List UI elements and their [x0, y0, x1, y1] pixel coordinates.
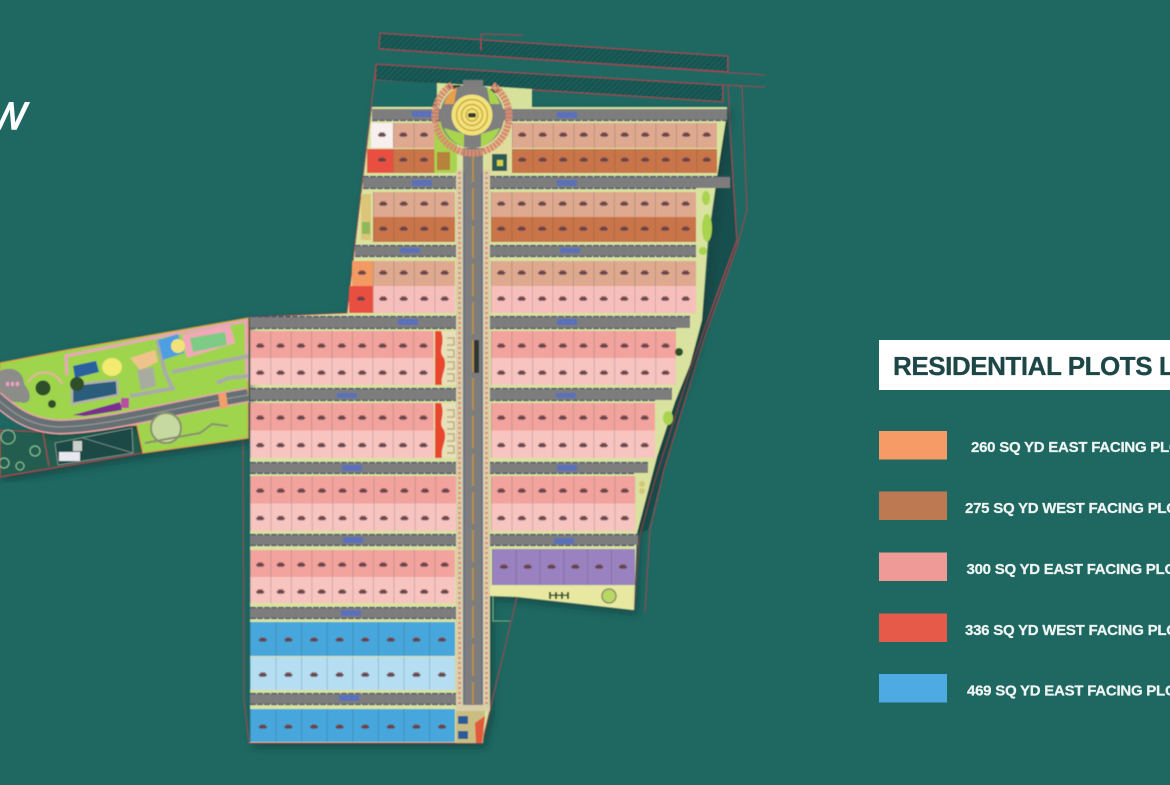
western garden by block 2: [361, 194, 371, 240]
tree canopy: [36, 377, 84, 408]
entrance plaza: [434, 80, 532, 173]
gate blocks: [446, 85, 461, 89]
block 8 plots: [250, 622, 455, 690]
legend: [879, 340, 1170, 702]
legend item 300 sq yd: [879, 552, 1170, 581]
lower landscaped panel: [0, 425, 143, 477]
lower-left garden marks: [0, 430, 40, 470]
block 9 plots: [250, 709, 455, 742]
grey pad: [137, 367, 156, 390]
green park: [0, 318, 248, 453]
road name tags: [337, 111, 580, 701]
east buffer strip: [634, 85, 747, 612]
legend item 469 sq yd: [879, 674, 1170, 702]
legend item 275 sq yd: [879, 492, 1170, 520]
swimming pool area: [158, 334, 185, 360]
lower circular garden: [151, 413, 181, 443]
utility block: [456, 711, 485, 743]
walking path: [145, 424, 228, 443]
pink perimeter walk: [66, 321, 247, 380]
blue courts: [73, 361, 99, 378]
gate: [218, 393, 228, 408]
grey internal paths: [130, 340, 248, 396]
legend title: [879, 340, 1170, 390]
entrance drive: [0, 395, 248, 427]
block 2 plots: [373, 192, 696, 242]
avenue name tag: [474, 340, 479, 373]
central avenue: [456, 148, 490, 711]
highway bands: [375, 33, 765, 102]
orange play area: [130, 350, 158, 370]
block 4 plots: [250, 331, 676, 385]
pink plaza marks: [6, 382, 19, 386]
circular garden: [28, 372, 62, 384]
south-east utility lines: [493, 596, 510, 621]
road edge kerbs: [250, 120, 730, 704]
yellow play area: [102, 358, 122, 376]
site plan: [0, 33, 765, 743]
grey rocks: [0, 369, 30, 403]
block 6 plots: [250, 476, 635, 531]
magenta pad: [121, 398, 129, 408]
south park under purple plots: [490, 586, 633, 610]
legend item 336 sq yd: [879, 614, 1170, 642]
clubhouse left: [437, 152, 450, 170]
tennis court: [182, 325, 235, 358]
left amenities arm: [0, 318, 248, 477]
wave gardens: [434, 331, 456, 458]
lower court: [43, 428, 133, 466]
site boundary: [243, 64, 517, 743]
legend item 260 sq yd: [879, 431, 1170, 460]
horizontal roads: [250, 109, 730, 704]
block 7 plots: [250, 549, 635, 603]
block 5 plots: [250, 403, 655, 458]
main site base: [250, 80, 727, 743]
eastern parks: [639, 191, 712, 494]
block 3 plots: [349, 261, 696, 313]
roundabout: [435, 84, 509, 153]
dark water body: [72, 380, 118, 404]
purple wedge: [73, 402, 122, 416]
block 1 plots: [367, 123, 717, 173]
clubhouse right: [492, 154, 507, 171]
